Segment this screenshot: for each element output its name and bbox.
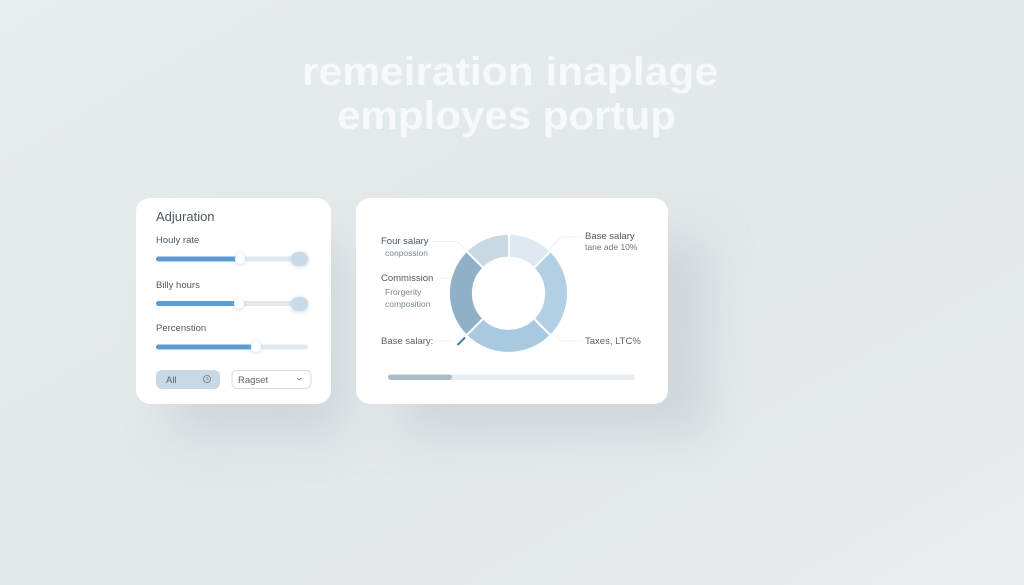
heading: adjuration: Adjuration bbox=[156, 209, 215, 224]
label: commission bbox=[381, 273, 433, 309]
label: commission: Frorgerity bbox=[385, 287, 422, 297]
slider: billable hours bbox=[156, 280, 308, 311]
dropdown: ragset: Ragset bbox=[238, 375, 268, 386]
label: commission: composition bbox=[385, 299, 431, 309]
slider: hourly rate bbox=[156, 235, 308, 266]
label: four salary: conpossion bbox=[385, 248, 428, 258]
slider: percentage: Percenstion bbox=[156, 323, 206, 334]
title bbox=[302, 50, 718, 138]
title: employes portup bbox=[337, 94, 676, 138]
tick marker bbox=[458, 338, 465, 345]
label: base salary right bbox=[585, 231, 638, 252]
label: base salary right: Base salary bbox=[585, 231, 635, 242]
label: commission: Commission bbox=[381, 273, 433, 284]
button: all bbox=[156, 370, 220, 389]
leader lines bbox=[431, 237, 582, 341]
title: remeiration inaplage bbox=[302, 50, 718, 94]
panel: salary donut chart bbox=[356, 198, 668, 404]
donut chart bbox=[461, 232, 556, 341]
label: base salary left: Base salary: bbox=[381, 336, 433, 347]
slider: billable hours: Billy hours bbox=[156, 280, 200, 291]
label: base salary right: tane ade 10% bbox=[585, 242, 638, 252]
panel shadows bbox=[170, 240, 710, 435]
label: four salary bbox=[381, 236, 429, 258]
slider: percentage bbox=[156, 323, 308, 352]
slider: hourly rate: Houly rate bbox=[156, 235, 199, 246]
label: taxes: Taxes, LTC% bbox=[585, 336, 641, 347]
progress bar bbox=[388, 374, 635, 380]
panel: adjuration controls bbox=[136, 198, 331, 404]
dropdown: ragset bbox=[232, 370, 311, 388]
label: four salary: Four salary bbox=[381, 236, 429, 247]
button: all: All bbox=[166, 375, 177, 386]
